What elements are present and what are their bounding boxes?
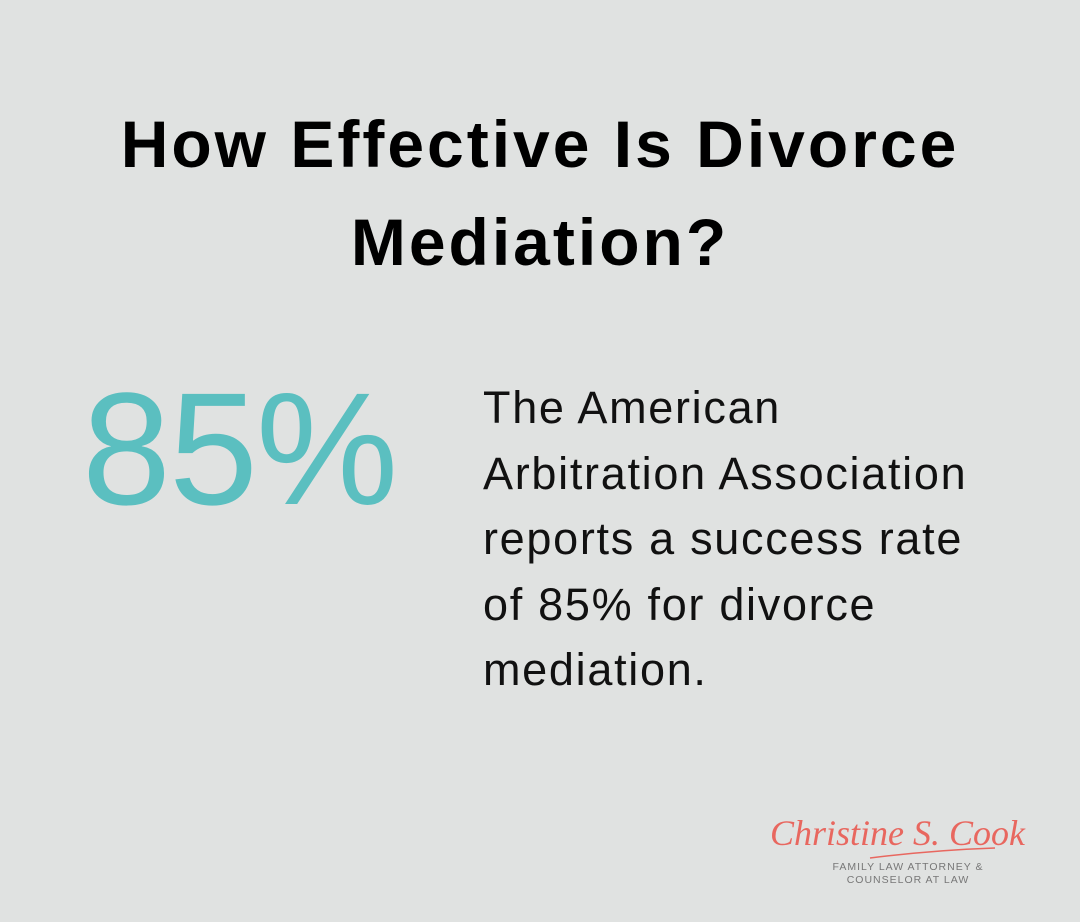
description text: of 85% for divorce bbox=[483, 578, 876, 630]
description text: The American bbox=[483, 382, 781, 433]
description text: mediation. bbox=[483, 644, 708, 695]
description text: reports a success rate bbox=[483, 513, 963, 564]
title bbox=[121, 107, 959, 279]
description text bbox=[483, 382, 967, 695]
logo: FAMILY LAW ATTORNEY & bbox=[833, 861, 983, 873]
logo bbox=[770, 813, 1026, 886]
logo: COUNSELOR AT LAW bbox=[847, 874, 969, 886]
big stat: 85% bbox=[82, 359, 396, 538]
logo: Christine S. Cook bbox=[770, 813, 1026, 853]
title: How Effective Is Divorce bbox=[121, 107, 959, 181]
description text: Arbitration Association bbox=[483, 448, 967, 498]
title: Mediation? bbox=[351, 205, 729, 279]
